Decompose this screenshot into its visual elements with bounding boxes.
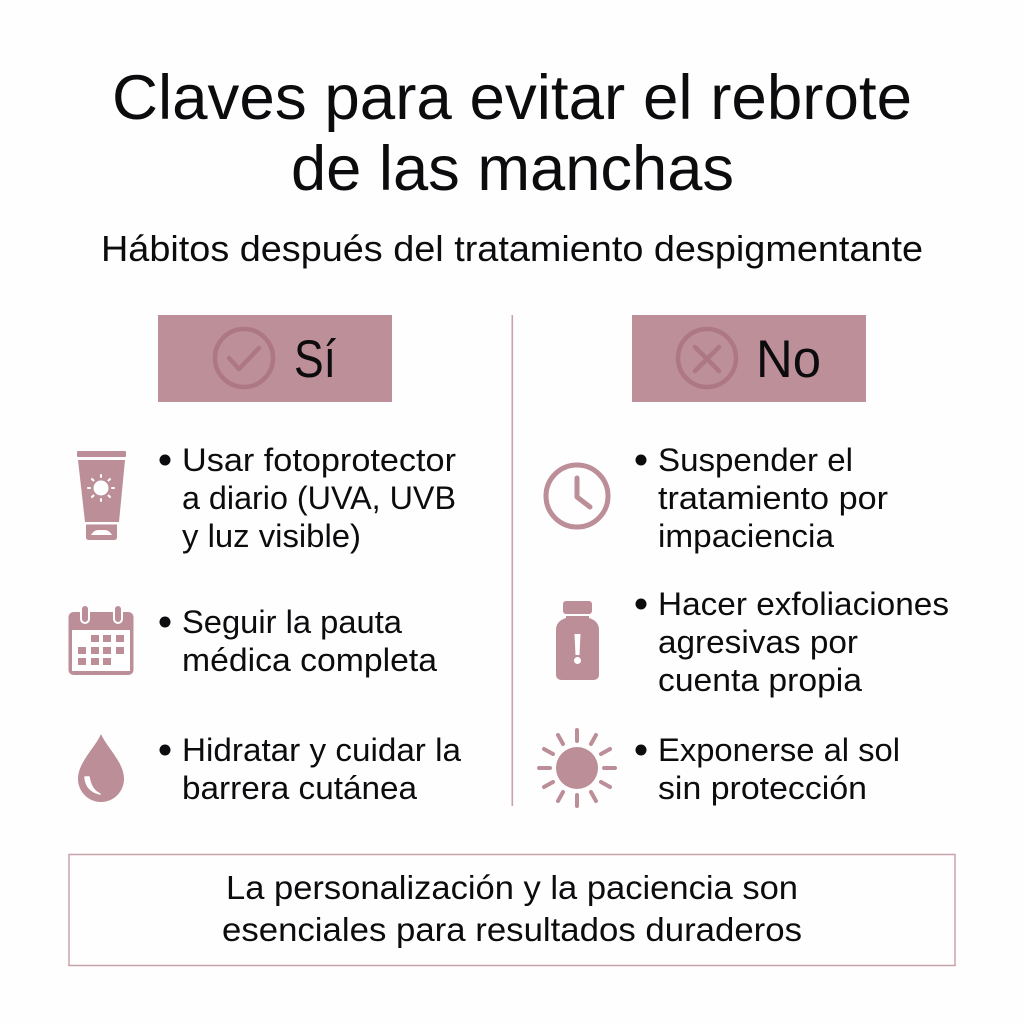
list item: hidratar: Hidratar y cuidar la (182, 732, 462, 768)
list item: pauta médica: Seguir la pauta (182, 604, 403, 640)
icon: sun (539, 730, 615, 806)
list item: suspender: Suspender el (658, 442, 853, 478)
list item: exfoliaciones: Hacer exfoliaciones (658, 586, 949, 622)
list item: exponerse: Exponerse al sol (658, 732, 900, 768)
title: Claves para evitar el rebrote (112, 63, 912, 133)
panel: Sí header (158, 315, 392, 402)
list item: fotoprotector: a diario (UVA, UVB (182, 480, 456, 516)
list item: pauta médica: médica completa (182, 642, 438, 678)
title (112, 63, 912, 204)
icon: bottle warning (556, 601, 599, 680)
list item: exfoliaciones: agresivas por (658, 624, 858, 660)
panel: Sí header: Sí (294, 330, 336, 389)
list item: suspender (636, 442, 888, 554)
subtitle: Hábitos después del tratamiento despigmentante (101, 228, 923, 269)
list item: suspender: impaciencia (658, 518, 835, 554)
list item: pauta médica (160, 604, 438, 678)
center divider (512, 315, 513, 806)
list item: fotoprotector: Usar fotoprotector (182, 442, 456, 478)
panel: No header: No (756, 330, 821, 389)
icon: cross circle (678, 329, 736, 387)
list item: suspender: tratamiento por (658, 480, 888, 516)
title: de las manchas (291, 134, 734, 204)
icon: water drop (78, 734, 124, 802)
icon: clock (546, 465, 608, 527)
list item: hidratar (160, 732, 462, 806)
callout: La personalización y la paciencia son (226, 869, 798, 906)
list item: hidratar: barrera cutánea (182, 770, 418, 806)
panel: No header (632, 315, 866, 402)
list item: fotoprotector: y luz visible) (182, 518, 361, 554)
list item: exfoliaciones: cuenta propia (658, 662, 863, 698)
icon: check circle (215, 329, 273, 387)
list item: exfoliaciones (636, 586, 949, 698)
callout (69, 854, 955, 966)
list item: exponerse (636, 732, 900, 806)
list item: exponerse: sin protección (658, 770, 867, 806)
callout: esenciales para resultados duraderos (222, 911, 802, 948)
icon: calendar (68, 605, 134, 675)
icon: sunscreen tube (77, 451, 126, 540)
list item: fotoprotector (160, 442, 456, 554)
